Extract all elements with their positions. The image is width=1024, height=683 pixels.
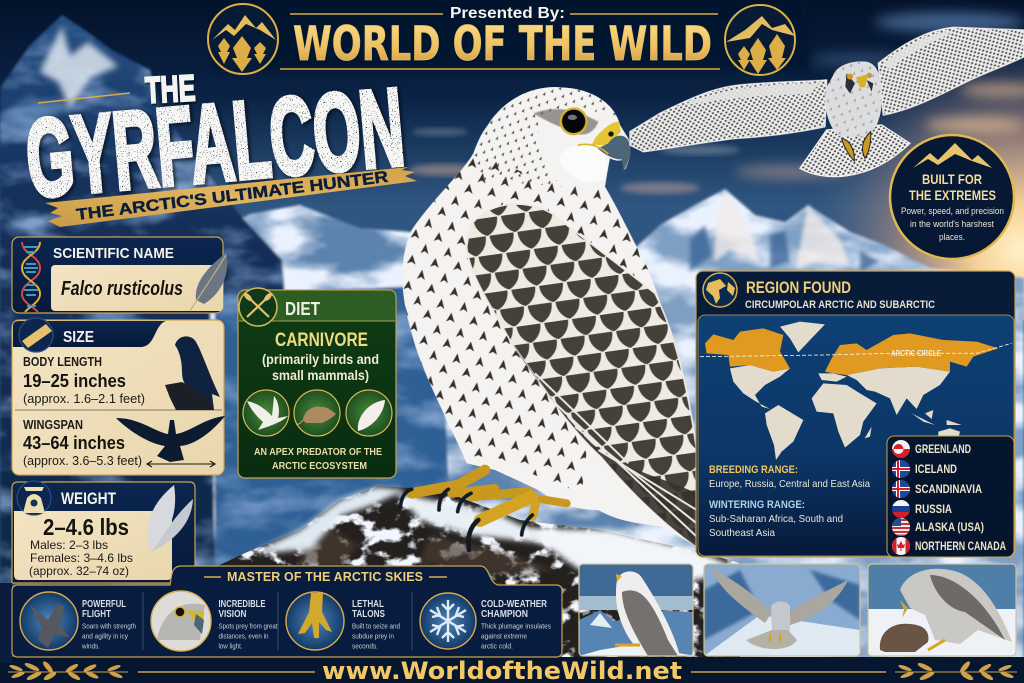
panel: master of the arctic skies <box>12 566 562 657</box>
title: the gyrfalcon: GYRFALCON <box>21 65 409 221</box>
panel: diet: AN APEX PREDATOR OF THE <box>254 446 382 458</box>
feature: cold-weather champion: arctic cold. <box>481 642 513 650</box>
feature: lethal talons: Built to seize and <box>352 622 400 630</box>
falcon eye <box>560 107 588 135</box>
feature: powerful flight: Soars with strength <box>82 622 136 630</box>
panel: scientific name: SCIENTIFIC NAME <box>53 245 174 262</box>
subtitle banner: THE ARCTIC'S ULTIMATE HUNTER <box>75 169 390 224</box>
panel: size: (approx. 1.6–2.1 feet) <box>23 392 145 406</box>
panel: size: (approx. 3.6–5.3 feet) <box>23 454 142 468</box>
map: arctic circle line <box>700 343 1012 357</box>
panel: region found: REGION FOUND <box>746 278 851 297</box>
icon: prey rodent <box>294 390 340 436</box>
feature: lethal talons: LETHAL <box>352 599 384 610</box>
panel: diet: CARNIVORE <box>275 330 368 351</box>
title: the gyrfalcon <box>21 65 417 227</box>
panel: weight: Males: 2–3 lbs <box>30 538 108 552</box>
icon: scale <box>17 481 51 515</box>
falcon body <box>402 87 697 547</box>
flag: greenland <box>892 440 910 458</box>
text: wintering range: Southeast Asia <box>709 527 775 539</box>
body <box>825 61 882 137</box>
panel: size: SIZE <box>63 329 94 346</box>
legend: countries: GREENLAND <box>915 444 971 456</box>
icon: feather <box>190 253 227 311</box>
icon: perched falcon silhouette <box>165 336 220 410</box>
panel: weight: 2–4.6 lbs <box>43 514 129 540</box>
footer bar <box>0 583 1024 683</box>
panel: scientific name <box>12 237 227 313</box>
feature: powerful flight: FLIGHT <box>82 609 111 620</box>
text: wintering range <box>709 499 843 539</box>
falcon primaries <box>512 343 697 547</box>
panel: size: WINGSPAN <box>23 418 83 432</box>
photo: gyrfalcon in flight <box>704 564 860 656</box>
panel: diet: ARCTIC ECOSYSTEM <box>272 460 367 472</box>
icon: left mountain badge <box>208 4 278 74</box>
title: the gyrfalcon: THE <box>144 67 196 111</box>
panel: region found: CIRCUMPOLAR ARCTIC AND SUBARCTIC <box>745 299 935 311</box>
legend: countries: ICELAND <box>915 464 957 476</box>
feature: cold-weather champion: COLD-WEATHER <box>481 599 548 610</box>
feature: incredible vision: VISION <box>218 609 246 620</box>
icon: prey feather <box>346 390 392 436</box>
feature: cold-weather champion: CHAMPION <box>481 609 528 620</box>
icon: ruler <box>19 318 53 352</box>
feature: incredible vision <box>151 591 278 651</box>
header: presented by world of the wild: WORLD OF THE WILD <box>293 17 712 72</box>
arrow: wingspan measure <box>147 461 215 467</box>
panel: diet: DIET <box>285 299 320 319</box>
feature: cold-weather champion: Thick plumage insulates <box>481 622 551 630</box>
photo: gyrfalcon with prey <box>868 564 1016 656</box>
legend: countries: RUSSIA <box>915 504 952 516</box>
badge: built for the extremes: BUILT FOR <box>922 171 982 187</box>
feature: incredible vision: low light. <box>218 642 242 650</box>
feature: incredible vision: INCREDIBLE <box>218 599 266 610</box>
text: breeding range: BREEDING RANGE: <box>709 464 798 476</box>
flag: canada <box>892 537 910 555</box>
panel: size: BODY LENGTH <box>23 355 102 369</box>
text: wintering range: Sub-Saharan Africa, South and <box>709 513 843 525</box>
panel: weight: Females: 3–4.6 lbs <box>30 551 133 565</box>
panel: size: 19–25 inches <box>23 370 126 391</box>
feature: powerful flight: winds. <box>81 642 100 650</box>
flag: scandinavia <box>892 480 910 498</box>
falcon breast spots <box>402 153 648 493</box>
rock perch with snow <box>205 486 740 683</box>
icon: right laurel <box>895 660 1017 682</box>
left wing <box>630 80 827 152</box>
panel: scientific name: Falco rusticolus <box>61 278 183 300</box>
icon: white feathers <box>148 485 193 552</box>
icon: dna helix <box>22 242 40 312</box>
falcon head markings <box>473 87 618 187</box>
world map: ARCTIC CIRCLE <box>891 349 942 358</box>
badge: built for the extremes: places. <box>939 232 965 243</box>
badge: built for the extremes: Power, speed, and precision <box>901 206 1004 217</box>
feature: lethal talons: TALONS <box>352 609 385 620</box>
badge: built for the extremes: THE EXTREMES <box>909 187 996 203</box>
feet <box>842 132 871 161</box>
icon: right mountain badge <box>725 5 795 75</box>
legend: countries: SCANDINAVIA <box>915 484 982 496</box>
map: land masses <box>730 322 962 460</box>
panel: diet: small mammals) <box>272 367 369 383</box>
panel: diet <box>238 288 396 478</box>
feature: powerful flight: POWERFUL <box>82 599 126 610</box>
flag: iceland <box>892 460 910 478</box>
legend: countries: ALASKA (USA) <box>915 522 984 534</box>
icon: left laurel <box>8 660 128 682</box>
feature: powerful flight <box>20 592 136 650</box>
header: presented by world of the wild: Presented By: <box>450 5 565 22</box>
header: presented by world of the wild <box>208 0 808 75</box>
falcon talons <box>400 470 567 550</box>
panel: weight: (approx. 32–74 oz) <box>29 564 129 578</box>
badge: built for the extremes: in the world's harshest <box>910 219 994 230</box>
title: the gyrfalcon: GYRFALCON <box>24 67 411 223</box>
text: breeding range <box>709 464 870 490</box>
main gyrfalcon illustration <box>400 87 697 550</box>
text: breeding range: Europe, Russia, Central and East Asia <box>709 478 870 490</box>
feature: powerful flight: and agility in icy <box>82 632 128 640</box>
icon: crossed fork and knife <box>239 288 277 326</box>
world map <box>698 315 1014 556</box>
panel: master of the arctic skies: MASTER OF THE ARCTIC SKIES <box>227 570 423 584</box>
icon: mountain <box>913 143 992 168</box>
photo: perched gyrfalcon <box>579 564 693 656</box>
panel: diet: (primarily birds and <box>262 351 379 367</box>
title: the gyrfalcon: THE <box>145 69 197 113</box>
feature: lethal talons: seconds. <box>352 642 378 650</box>
text: wintering range: WINTERING RANGE: <box>709 499 805 511</box>
panel: weight <box>12 481 195 583</box>
subtitle banner <box>45 167 417 227</box>
icon: wingspan silhouette <box>116 416 225 462</box>
falcon beak <box>578 122 630 171</box>
icon: globe <box>703 273 737 307</box>
panel: size: 43–64 inches <box>23 432 125 453</box>
panel: size <box>12 318 225 475</box>
legend: countries <box>887 436 1014 557</box>
feature: cold-weather champion: against extreme <box>481 632 527 640</box>
panel: region found <box>696 271 1015 557</box>
icon: prey bird <box>243 390 289 436</box>
feature: lethal talons <box>286 592 400 650</box>
falcon wing scaled feathers <box>467 204 697 547</box>
feature: incredible vision: distances, even in <box>218 632 268 640</box>
feature: lethal talons: subdue prey in <box>352 632 394 640</box>
right wing <box>878 27 1024 115</box>
map: breeding range overlay <box>705 328 998 375</box>
feature: cold-weather champion <box>420 593 551 650</box>
flag: usa <box>892 518 910 536</box>
badge: built for the extremes <box>890 135 1014 259</box>
tail <box>800 125 910 177</box>
panel: weight: WEIGHT <box>61 489 116 508</box>
flying gyrfalcon illustration <box>630 27 1024 177</box>
flag: russia <box>892 500 910 518</box>
feature: incredible vision: Spots prey from great <box>218 622 278 630</box>
